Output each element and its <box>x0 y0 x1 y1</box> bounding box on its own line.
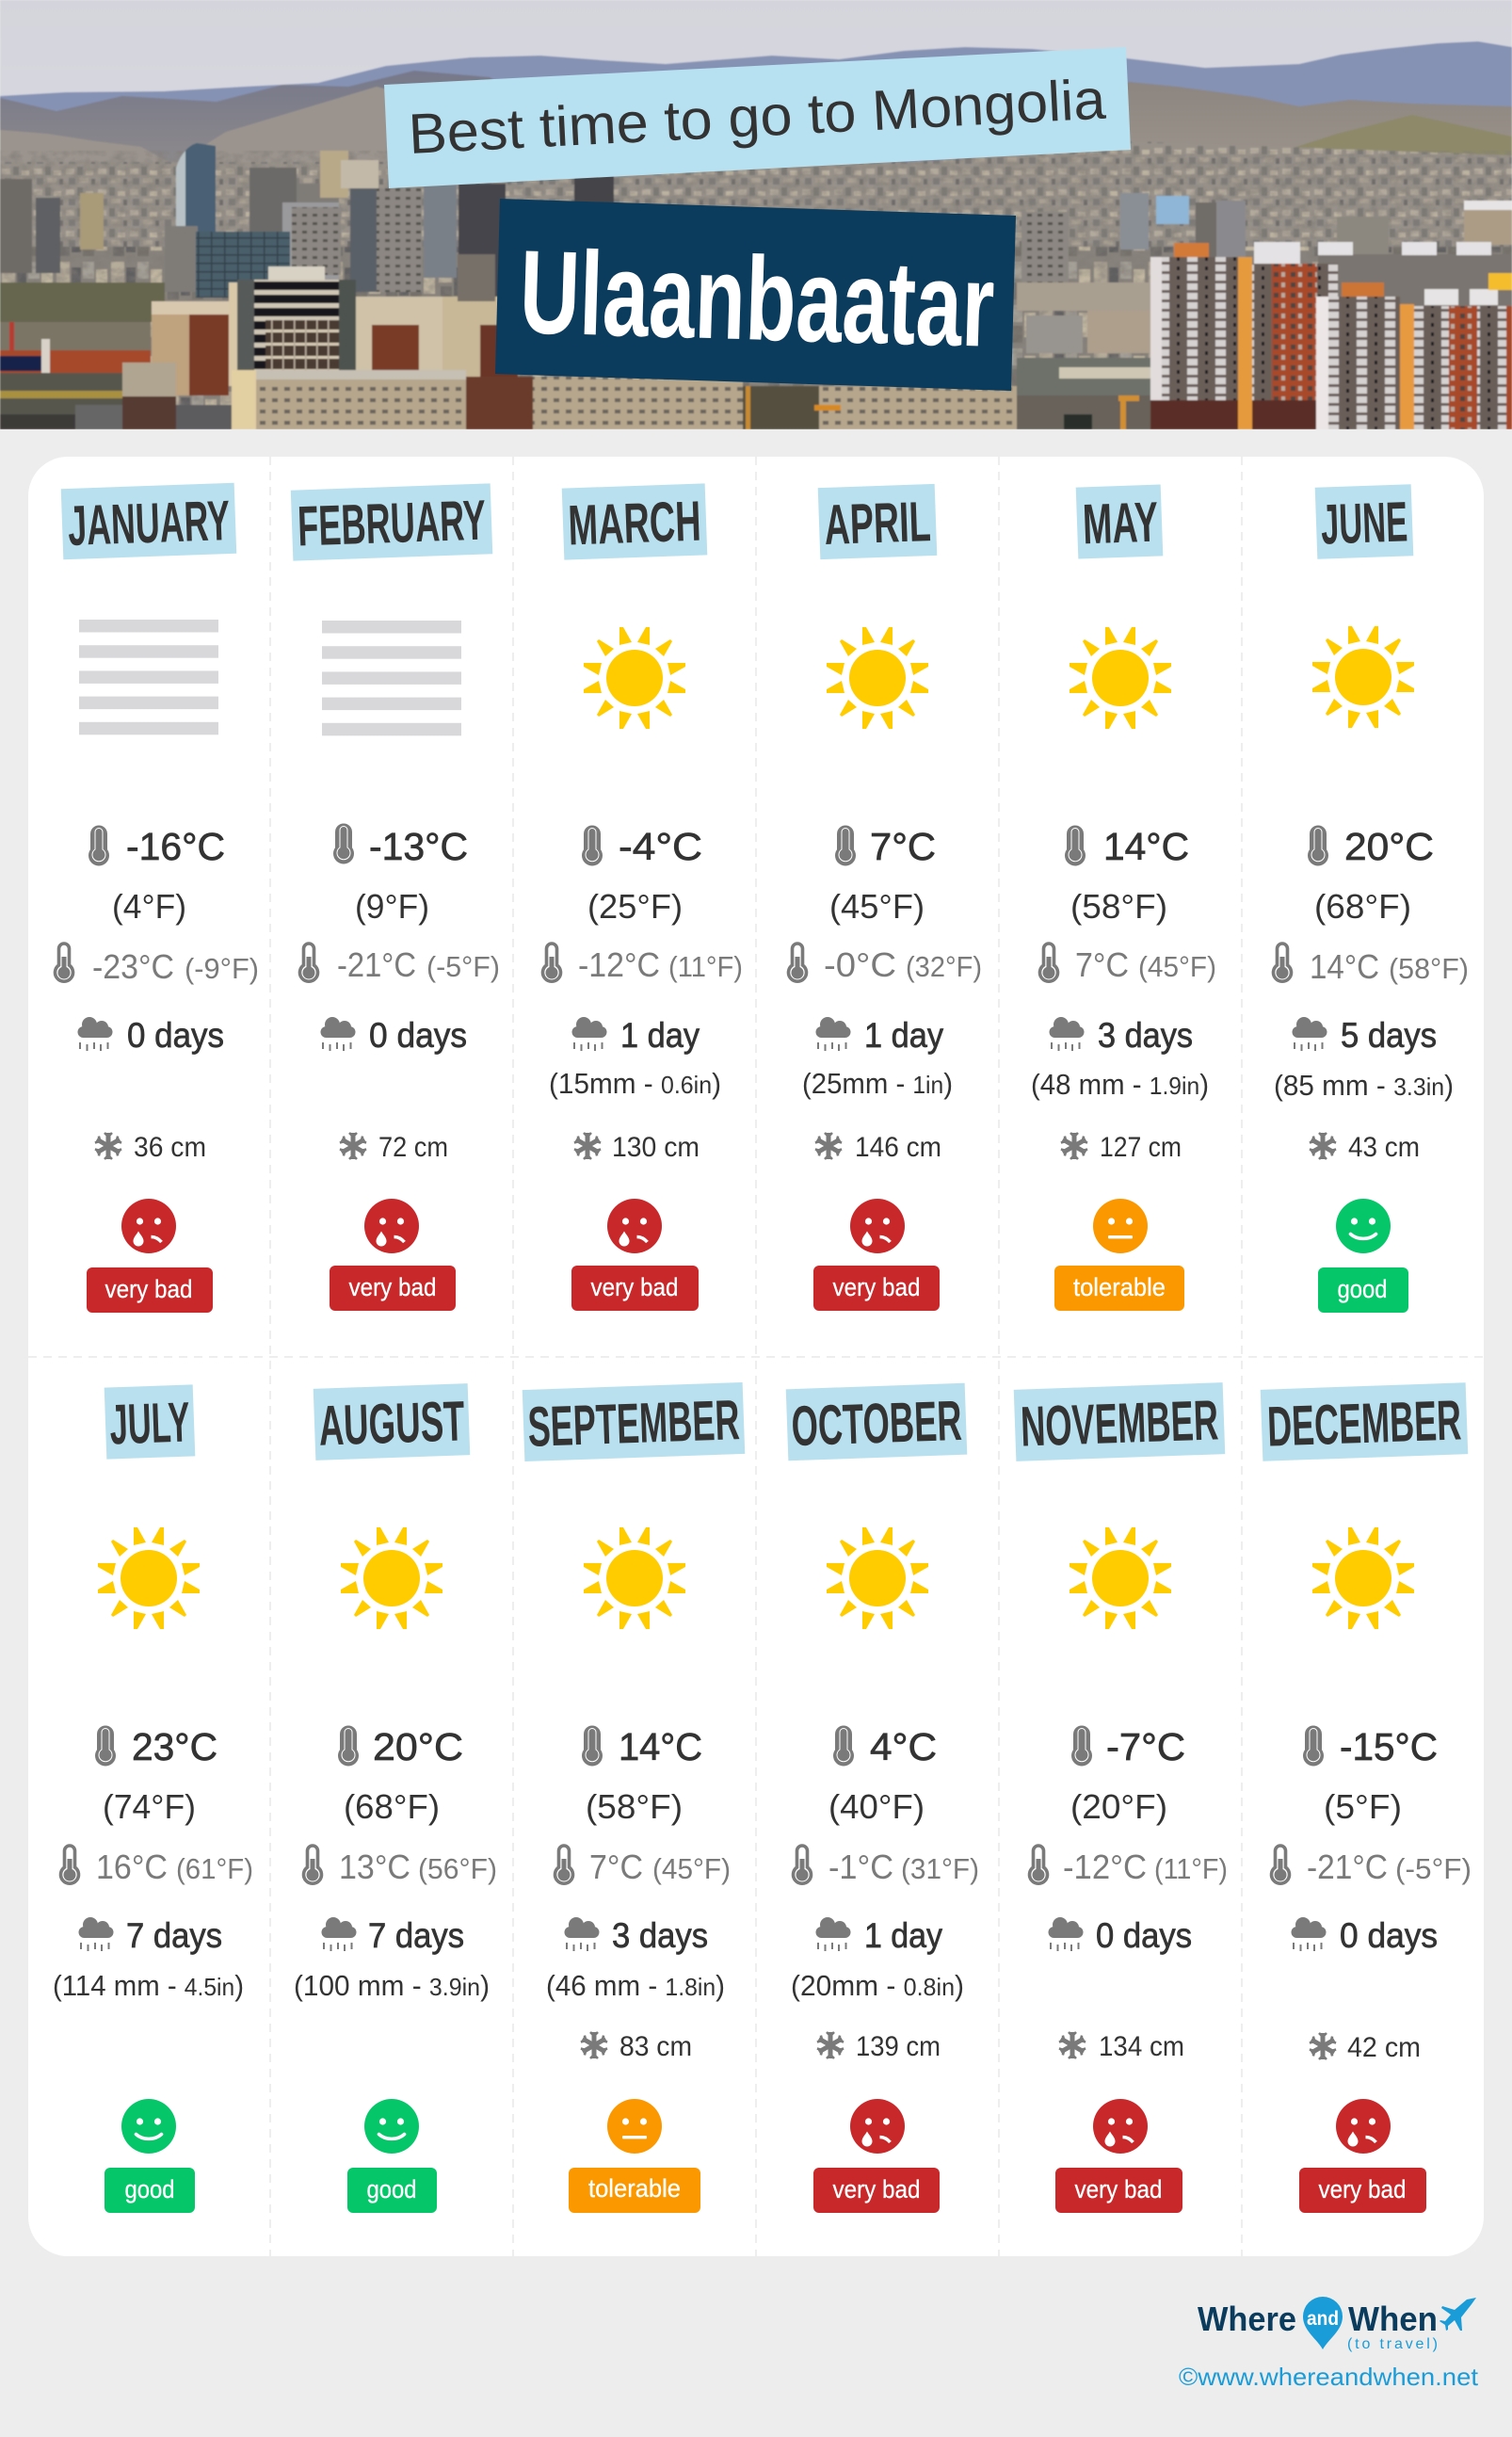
rain days: 0 days <box>369 1016 467 1055</box>
month label: APRIL <box>823 490 932 557</box>
average temperature: -16°C <box>126 825 225 868</box>
icon: sun <box>827 1527 928 1629</box>
month label <box>61 483 236 559</box>
rating badge <box>347 2168 437 2213</box>
month label: NOVEMBER <box>1020 1388 1219 1459</box>
low temperature: (32°F) <box>906 950 982 983</box>
panel: November <box>1014 1382 1228 2213</box>
month label <box>818 484 937 559</box>
average temperature <box>835 825 936 868</box>
left distant towers <box>176 143 216 235</box>
month label: JULY <box>108 1391 191 1456</box>
snow depth <box>817 2031 941 2062</box>
snow depth <box>1310 1132 1420 1163</box>
precipitation amount: (20mm - 0.8in) <box>791 1969 964 2002</box>
logo: Where and When (to travel): and <box>1307 2308 1339 2330</box>
rating face <box>850 2099 905 2154</box>
low temperature: -21°C <box>337 945 416 984</box>
icon: sun <box>827 627 928 729</box>
rain days <box>1292 1916 1438 1955</box>
average temperature: 20°C <box>373 1725 463 1768</box>
temperature fahrenheit: (25°F) <box>587 887 683 926</box>
snow depth <box>1310 2032 1421 2063</box>
front tan buildings <box>122 363 176 396</box>
low temperature: (45°F) <box>652 1852 731 1885</box>
snow depth: 134 cm <box>1099 2031 1184 2062</box>
panel: April <box>789 484 982 1311</box>
panel: March <box>542 483 743 1311</box>
rating badge: good <box>1337 1275 1388 1303</box>
average temperature: 20°C <box>1344 825 1434 868</box>
month label: OCTOBER <box>790 1389 963 1458</box>
low temperature <box>1271 1846 1472 1886</box>
month label <box>105 1384 195 1460</box>
low temperature: (58°F) <box>1389 952 1469 985</box>
low temperature <box>793 1846 979 1886</box>
average temperature: -7°C <box>1106 1725 1185 1768</box>
icon: sun <box>1312 626 1414 728</box>
logo: Where and When (to travel): When <box>1348 2300 1438 2338</box>
month label: FEBRUARY <box>297 489 487 557</box>
average temperature <box>833 1725 937 1768</box>
low temperature <box>789 944 982 984</box>
precipitation amount: (114 mm - 4.5in) <box>53 1969 244 2002</box>
rating face <box>1093 1199 1148 1253</box>
panel: June <box>1273 484 1469 1313</box>
panel: February <box>291 483 500 1311</box>
low temperature <box>555 1846 731 1886</box>
temperature fahrenheit: (20°F) <box>1070 1787 1167 1826</box>
rating face <box>121 1199 176 1253</box>
rain days: 1 day <box>864 1916 942 1955</box>
rain days: 1 day <box>864 1016 943 1055</box>
snow depth <box>1061 1132 1182 1163</box>
rating face <box>364 2099 419 2154</box>
rain days <box>815 1016 943 1055</box>
logo: Where and When (to travel) <box>1198 2297 1476 2352</box>
snow depth: 43 cm <box>1348 1132 1420 1163</box>
temperature fahrenheit: (5°F) <box>1324 1787 1402 1826</box>
average temperature: 14°C <box>1103 825 1189 868</box>
average temperature: -13°C <box>369 825 468 868</box>
icon: sun <box>1070 627 1171 729</box>
rating face <box>1336 1199 1391 1253</box>
average temperature <box>338 1725 463 1768</box>
low temperature: 13°C <box>339 1848 410 1886</box>
rain days <box>1292 1016 1437 1055</box>
title banner: Ulaanbaatar: Ulaanbaatar <box>518 225 996 372</box>
icon: cloudy lines <box>322 621 461 735</box>
rain days: 7 days <box>368 1916 464 1955</box>
temperature fahrenheit: (45°F) <box>829 887 925 926</box>
rating badge <box>330 1266 456 1311</box>
panel: May <box>1031 484 1216 1311</box>
average temperature <box>95 1725 217 1768</box>
month label: MAY <box>1082 491 1159 556</box>
low temperature <box>1039 944 1216 984</box>
average temperature <box>1071 1725 1185 1768</box>
rain days: 5 days <box>1341 1016 1437 1055</box>
month label <box>523 1382 745 1461</box>
rating badge: tolerable <box>1073 1273 1166 1301</box>
main white card <box>28 457 1484 2256</box>
precipitation amount: (48 mm - 1.9in) <box>1031 1068 1209 1101</box>
icon: sun <box>584 627 685 729</box>
website credit: ©www.whereandwhen.net <box>1179 2363 1479 2391</box>
month label: JANUARY <box>67 489 231 557</box>
temperature fahrenheit: (68°F) <box>1314 887 1411 926</box>
rating badge: very bad <box>348 1273 437 1301</box>
snow depth: 83 cm <box>619 2031 692 2062</box>
average temperature: -15°C <box>1340 1725 1438 1768</box>
vegetation and rail band <box>0 282 165 322</box>
rating badge: very bad <box>591 1273 678 1301</box>
snow depth: 36 cm <box>134 1132 206 1163</box>
panel: July <box>53 1384 253 2213</box>
rain days: 0 days <box>1340 1916 1438 1955</box>
central right mid rise <box>1021 212 1069 287</box>
temperature fahrenheit: (68°F) <box>344 1787 440 1826</box>
snow depth: 127 cm <box>1100 1132 1182 1163</box>
average temperature: 14°C <box>619 1725 702 1768</box>
rain days: 0 days <box>127 1016 224 1055</box>
average temperature <box>1308 825 1434 868</box>
low temperature <box>542 944 743 984</box>
rating badge <box>571 1266 699 1311</box>
low temperature <box>303 1846 497 1886</box>
low temperature <box>60 1846 253 1886</box>
rating badge: very bad <box>832 1273 921 1301</box>
rating badge <box>1299 2168 1426 2213</box>
panel: August <box>294 1383 497 2213</box>
logo: Where and When (to travel): Where <box>1198 2300 1296 2338</box>
rain days <box>320 1016 467 1055</box>
rating badge <box>813 1266 940 1311</box>
low temperature: (61°F) <box>176 1852 253 1885</box>
month label <box>1014 1382 1225 1461</box>
icon: sun <box>98 1527 200 1629</box>
low temperature: (-5°F) <box>1395 1852 1472 1885</box>
snow depth: 42 cm <box>1347 2032 1421 2063</box>
average temperature: 7°C <box>870 825 936 868</box>
low temperature: 16°C <box>96 1848 168 1886</box>
foreground apartment towers <box>1174 243 1209 257</box>
month label <box>786 1383 967 1461</box>
low temperature <box>55 944 259 986</box>
low temperature: (11°F) <box>1154 1852 1228 1885</box>
snow depth <box>340 1132 448 1163</box>
precipitation amount: (25mm - 1in) <box>802 1067 953 1100</box>
back city right <box>1156 196 1189 224</box>
rain days <box>322 1916 464 1955</box>
low temperature: -23°C <box>92 947 174 986</box>
low temperature: (-9°F) <box>185 952 259 985</box>
rating badge: very bad <box>1075 2175 1162 2203</box>
rating face <box>607 1199 662 1253</box>
month label <box>562 483 707 560</box>
rating badge: good <box>367 2175 416 2203</box>
panel: January <box>55 483 259 1313</box>
precipitation amount: (100 mm - 3.9in) <box>294 1969 490 2002</box>
rain days <box>79 1916 222 1955</box>
rating badge <box>105 2168 195 2213</box>
rating badge: very bad <box>1318 2175 1407 2203</box>
low temperature: -21°C <box>1307 1848 1388 1886</box>
temperature fahrenheit: (58°F) <box>1070 887 1167 926</box>
average temperature <box>582 825 702 868</box>
low temperature: (11°F) <box>668 950 743 983</box>
snow depth: 146 cm <box>855 1132 941 1163</box>
rating badge <box>1055 2168 1182 2213</box>
rain days <box>565 1916 708 1955</box>
month label: AUGUST <box>317 1389 466 1458</box>
temperature fahrenheit: (58°F) <box>586 1787 683 1826</box>
average temperature <box>1065 825 1189 868</box>
rating face <box>121 2099 176 2154</box>
mid-ground tan and brick blocks <box>152 301 189 395</box>
low temperature <box>1030 1846 1228 1886</box>
month label <box>1076 484 1163 559</box>
snow depth <box>95 1132 206 1163</box>
snow depth <box>815 1132 941 1163</box>
logo: Where and When (to travel): (to travel) <box>1347 2336 1438 2352</box>
rating face <box>364 1199 419 1253</box>
title banner: Ulaanbaatar <box>495 199 1016 391</box>
panel: October <box>786 1383 979 2213</box>
rating face <box>1093 2099 1148 2154</box>
title banner: Best time to go to Mongolia: Best time to go to Mongolia <box>407 68 1107 166</box>
temperature fahrenheit: (9°F) <box>355 887 429 926</box>
month label <box>291 483 492 561</box>
rain days: 3 days <box>1098 1016 1193 1055</box>
low temperature: -12°C <box>1063 1848 1147 1886</box>
rain days: 0 days <box>1096 1916 1192 1955</box>
low temperature: 7°C <box>1075 945 1129 984</box>
snow depth <box>581 2031 692 2062</box>
icon: sun <box>1312 1527 1414 1629</box>
rating badge <box>1054 1266 1184 1311</box>
rating badge <box>813 2168 940 2213</box>
low temperature: (45°F) <box>1138 950 1216 983</box>
rating badge <box>569 2168 700 2213</box>
icon: cloudy lines <box>79 620 218 734</box>
rain days <box>815 1916 942 1955</box>
snow depth <box>1059 2031 1184 2062</box>
precipitation amount: (46 mm - 1.8in) <box>546 1969 725 2002</box>
precipitation amount: (15mm - 0.6in) <box>549 1067 721 1100</box>
snow depth: 72 cm <box>378 1132 448 1163</box>
icon: sun <box>584 1527 685 1629</box>
icon: sun <box>1070 1527 1171 1629</box>
rain days <box>77 1016 224 1055</box>
rain days: 7 days <box>126 1916 222 1955</box>
title banner: Best time to go to Mongolia <box>384 47 1131 188</box>
snow depth: 139 cm <box>856 2031 941 2062</box>
average temperature: -4°C <box>619 825 702 868</box>
rating face <box>1336 2099 1391 2154</box>
header photo: Ulaanbaatar skyline <box>0 0 1512 429</box>
low temperature <box>299 944 500 984</box>
rain days: 3 days <box>612 1916 708 1955</box>
rain days <box>1049 1016 1193 1055</box>
panel: December <box>1261 1382 1472 2213</box>
month label: SEPTEMBER <box>526 1388 741 1459</box>
month label: MARCH <box>567 490 702 557</box>
low temperature: 7°C <box>589 1848 643 1886</box>
low temperature: (31°F) <box>901 1852 979 1885</box>
rating face <box>850 1199 905 1253</box>
low temperature: -0°C <box>824 945 896 984</box>
average temperature <box>582 1725 702 1768</box>
rating badge: tolerable <box>588 2174 681 2203</box>
rating badge: good <box>124 2175 175 2203</box>
temperature fahrenheit: (40°F) <box>828 1787 925 1826</box>
rating badge <box>87 1267 213 1313</box>
average temperature: 23°C <box>132 1725 217 1768</box>
low temperature: (56°F) <box>418 1852 497 1885</box>
rain days: 1 day <box>620 1016 700 1055</box>
month label <box>1315 484 1413 559</box>
rain days <box>1049 1916 1192 1955</box>
rating badge <box>1318 1267 1408 1313</box>
temperature fahrenheit: (4°F) <box>112 887 186 926</box>
low temperature <box>1273 944 1469 986</box>
temperature fahrenheit: (74°F) <box>103 1787 196 1826</box>
rating face <box>607 2099 662 2154</box>
rain days <box>572 1016 700 1055</box>
month label: JUNE <box>1320 490 1408 557</box>
precipitation amount: (85 mm - 3.3in) <box>1274 1069 1454 1102</box>
month label <box>314 1383 470 1461</box>
panel: September <box>523 1382 745 2213</box>
low temperature: -12°C <box>578 945 660 984</box>
average temperature: 4°C <box>870 1725 937 1768</box>
low temperature: -1°C <box>828 1848 893 1886</box>
rating badge: very bad <box>832 2175 921 2203</box>
low temperature: (-5°F) <box>426 950 500 983</box>
rating badge: very bad <box>105 1275 192 1303</box>
low temperature: 14°C <box>1310 947 1379 986</box>
snow depth: 130 cm <box>612 1132 700 1163</box>
snow depth <box>574 1132 700 1163</box>
icon: sun <box>341 1527 442 1629</box>
